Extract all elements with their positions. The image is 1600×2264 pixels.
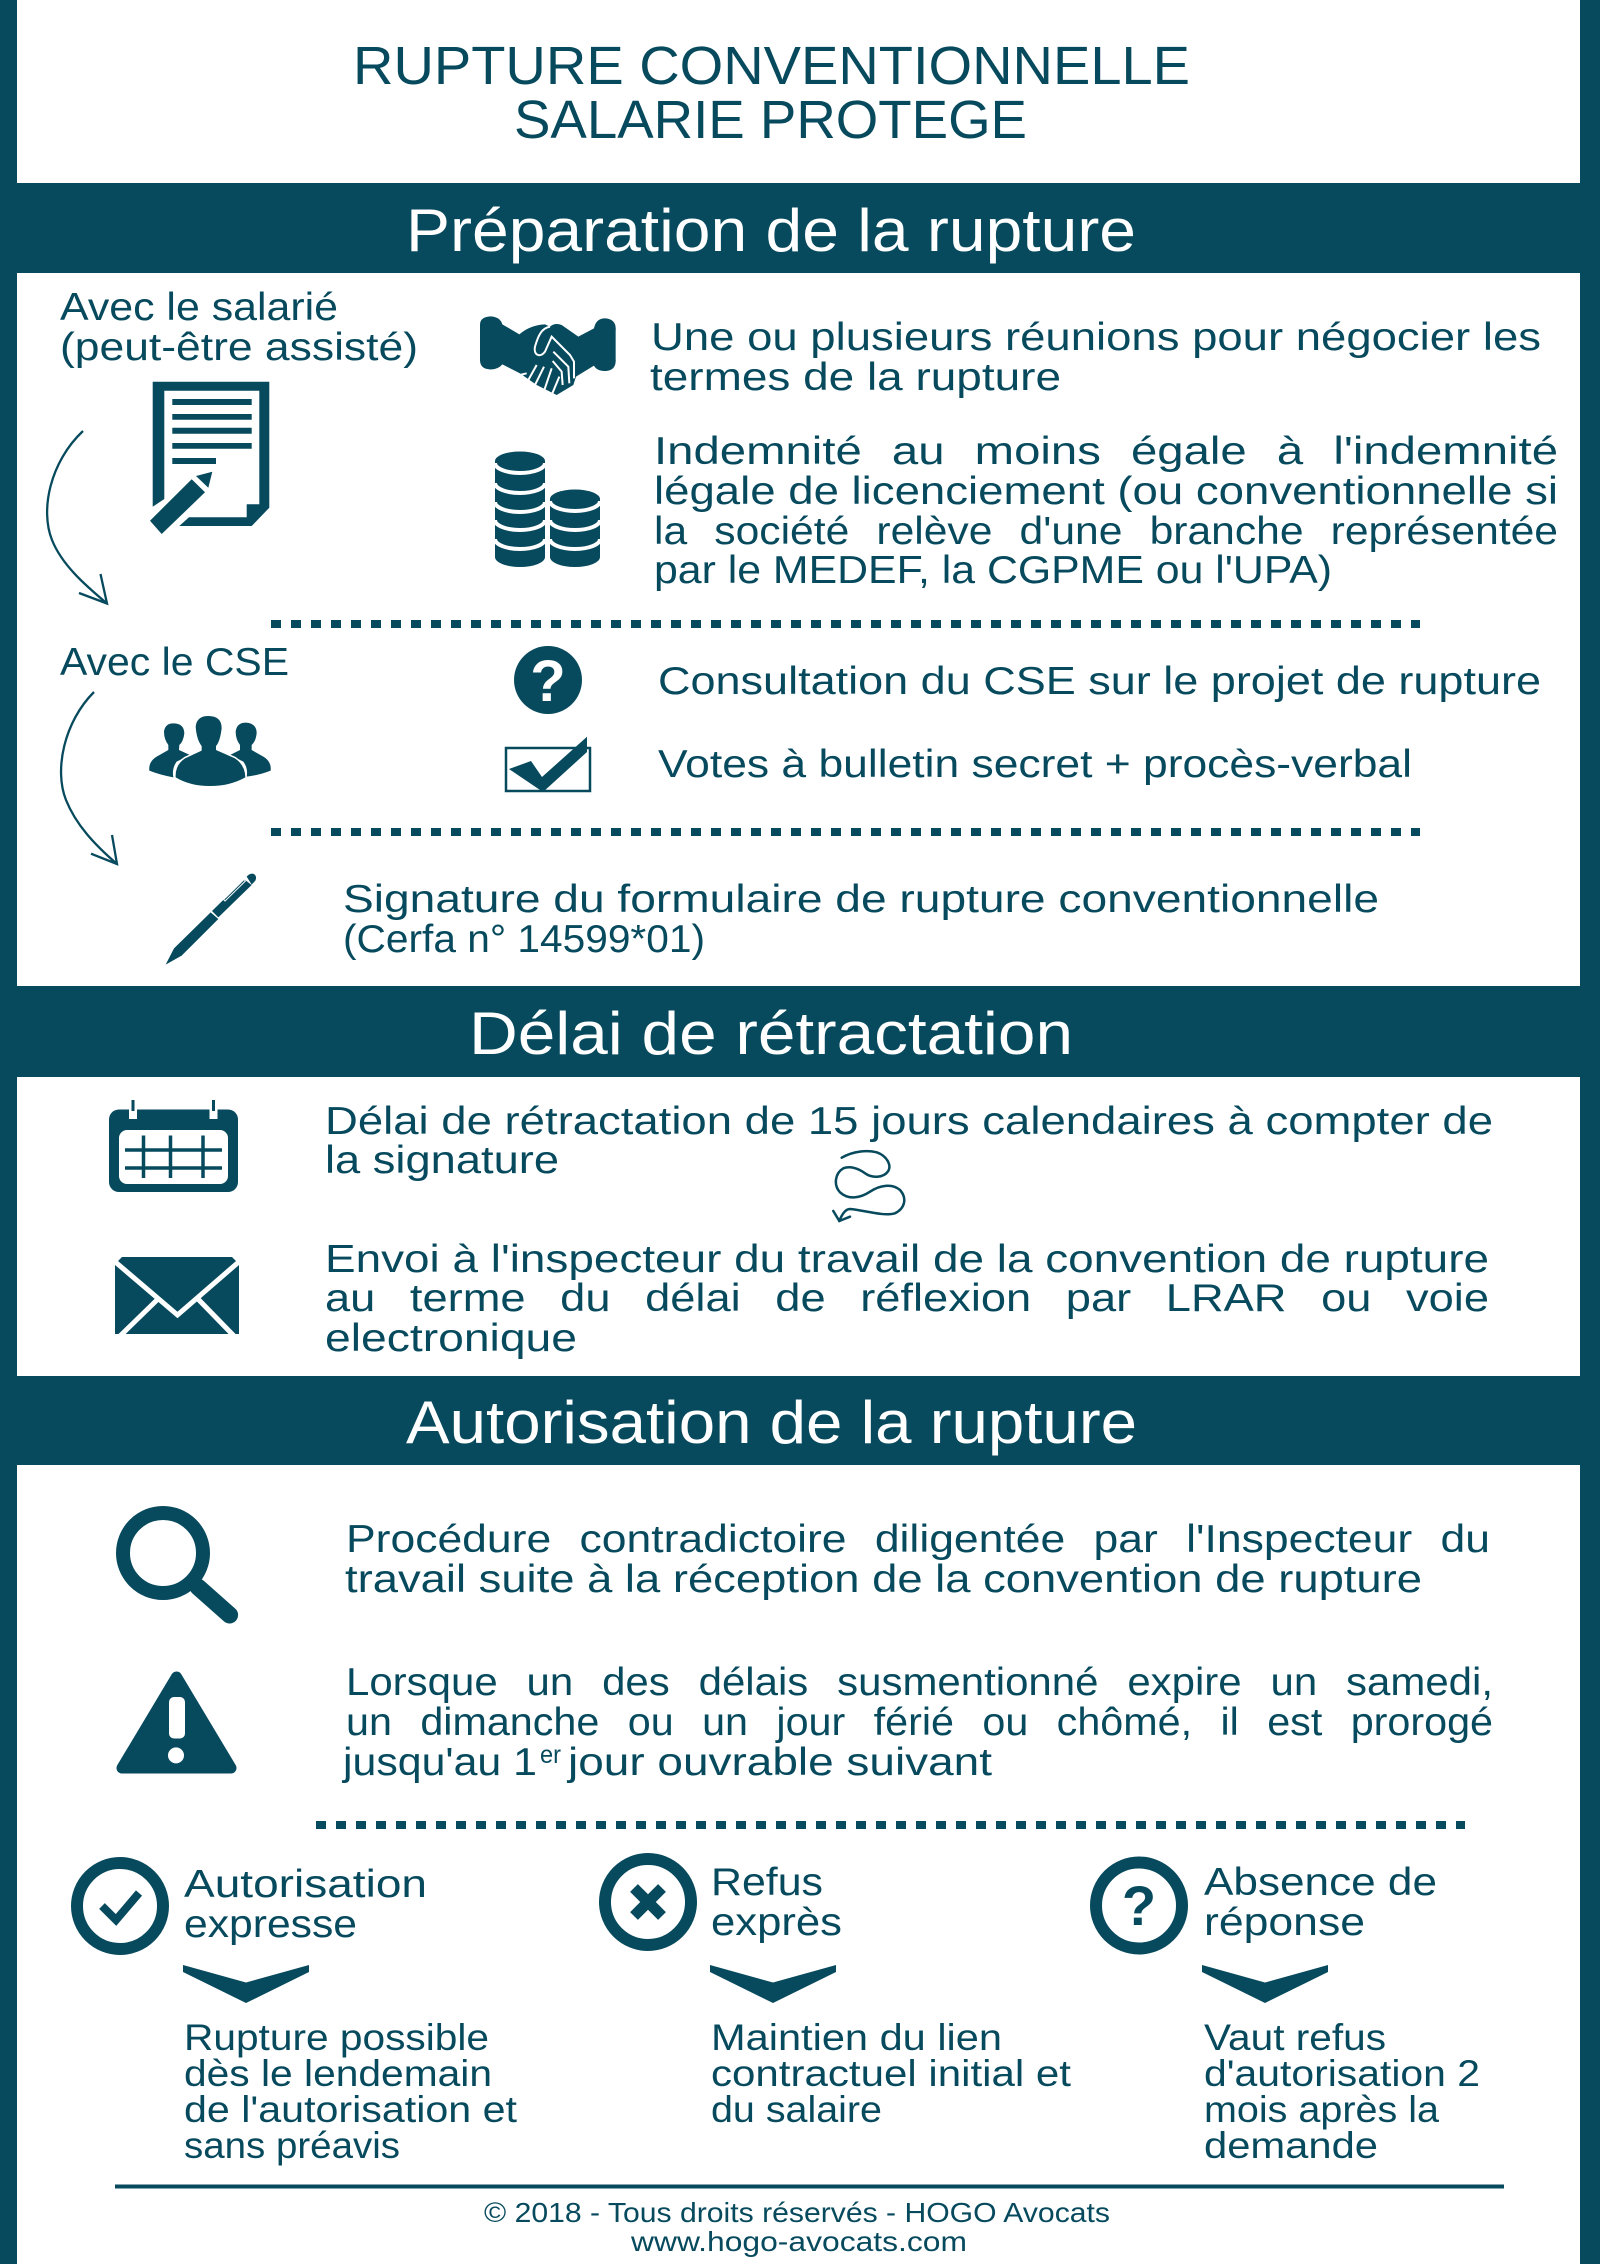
icon: check circle [77, 1863, 163, 1949]
heading: refus exprès [711, 1861, 842, 1944]
icon: pen [166, 874, 256, 965]
text: procédure contradictoire: Procédure contradictoire diligentée par l'Inspecteur du [346, 1518, 1490, 1561]
text: maintien du lien: contractuel initial et [711, 2053, 1072, 2094]
heading: délai de rétractation: Délai de rétractation [469, 1000, 1073, 1067]
text: procédure contradictoire: travail suite à la réception de la convention de rupture [345, 1558, 1422, 1601]
arrow: scribble [833, 1151, 904, 1221]
text: signature [343, 878, 1379, 961]
text: délai de 15 jours: la signature [325, 1139, 559, 1182]
footer: © 2018 - Tous droits réservés - HOGO Avocats [484, 2197, 1110, 2228]
text: envoi à l'inspecteur: au terme du délai de réflexion par LRAR ou voie [325, 1277, 1489, 1320]
text: votes: Votes à bulletin secret + procès-verbal [658, 743, 1412, 786]
text: maintien du lien: Maintien du lien [711, 2017, 1002, 2058]
text: délais prorogés: Lorsque un des délais susmentionné expire un samedi, [346, 1661, 1493, 1704]
text: réunions [650, 316, 1541, 399]
icon: question mark badge: ? [530, 649, 566, 714]
text: vaut refus [1204, 2017, 1480, 2166]
heading: autorisation expresse [184, 1863, 427, 1946]
icon: cross circle [605, 1859, 691, 1945]
heading: absence de réponse: réponse [1204, 1901, 1365, 1944]
panel: préparation [17, 273, 1580, 986]
heading: refus exprès: Refus [711, 1861, 823, 1904]
panel: autorisation de la rupture [17, 1465, 1580, 2264]
heading: absence de réponse [1204, 1861, 1437, 1944]
heading: absence de réponse: Absence de [1204, 1861, 1437, 1904]
text: maintien du lien [711, 2017, 1072, 2130]
icon: chevron [1202, 1965, 1328, 2003]
text: avec le salarié [60, 286, 418, 369]
text: rupture possible: dès le lendemain [184, 2053, 492, 2094]
icon: envelope [113, 1257, 241, 1336]
arrow: CSE to signature [61, 692, 117, 864]
text: vaut refus: Vaut refus [1204, 2017, 1386, 2058]
text: délais prorogés: jusqu'au 1 [342, 1741, 537, 1784]
text: indemnité: légale de licenciement (ou conventionnelle si [654, 470, 1558, 513]
icon: chevron [183, 1965, 309, 2003]
panel: délai de rétractation [17, 1077, 1580, 1376]
text: envoi à l'inspecteur: electronique [325, 1317, 577, 1360]
icon: ballot checkbox [506, 737, 590, 792]
text: maintien du lien: du salaire [711, 2089, 882, 2130]
icon: warning triangle [122, 1677, 231, 1768]
text: signature: Signature du formulaire de rupture conventionnelle [343, 878, 1379, 921]
text: réunions: Une ou plusieurs réunions pour négocier les [651, 316, 1541, 359]
arrow: salarié to CSE [47, 431, 107, 604]
icon: document and pencil [150, 382, 269, 534]
text: procédure contradictoire [345, 1518, 1490, 1601]
text: indemnité [654, 430, 1558, 592]
text: délais prorogés [342, 1661, 1493, 1784]
title: RUPTURE CONVENTIONNELLE [353, 36, 1190, 96]
text: avec le salarié: (peut-être assisté) [60, 326, 418, 369]
column: refus exprès [605, 1859, 1072, 2130]
text: rupture possible: Rupture possible [184, 2017, 489, 2058]
heading: autorisation expresse: Autorisation [184, 1863, 427, 1906]
title [353, 36, 1190, 150]
text: délai de 15 jours [325, 1100, 1493, 1182]
icon: chevron [710, 1965, 836, 2003]
text: consultation: Consultation du CSE sur le projet de rupture [658, 660, 1541, 703]
text: rupture possible [184, 2017, 518, 2166]
heading: refus exprès: exprès [711, 1901, 842, 1944]
text: signature: (Cerfa n° 14599*01) [343, 918, 705, 961]
footer: www.hogo-avocats.com [630, 2226, 967, 2257]
title: SALARIE PROTEGE [514, 90, 1027, 150]
icon: coin stacks [495, 452, 600, 567]
text: délais prorogés: jour ouvrable suivant [567, 1741, 992, 1784]
icon: calendar [109, 1100, 238, 1192]
heading: préparation de la rupture: Préparation de la rupture [406, 197, 1136, 264]
text: avec le salarié: Avec le salarié [60, 286, 338, 329]
text: délai de 15 jours: Délai de rétractation de 15 jours calendaires à compter de [325, 1100, 1493, 1143]
icon: question circle: ? [1122, 1874, 1156, 1937]
heading: autorisation de la rupture: Autorisation de la rupture [406, 1389, 1137, 1456]
icon: question circle [1096, 1862, 1182, 1948]
text: délais prorogés: un dimanche ou un jour férié ou chômé, il est prorogé [346, 1701, 1493, 1744]
text: avec le CSE: Avec le CSE [60, 641, 289, 684]
footer [484, 2197, 1110, 2257]
text: vaut refus: mois après la [1204, 2089, 1439, 2130]
column: autorisation expresse [77, 1863, 518, 2166]
text: indemnité: Indemnité au moins égale à l'indemnité [654, 430, 1558, 473]
text: rupture possible: de l'autorisation et [184, 2089, 518, 2130]
text: vaut refus: demande [1204, 2125, 1378, 2166]
icon: handshake [480, 316, 616, 395]
text: indemnité: par le MEDEF, la CGPME ou l'UPA) [654, 549, 1332, 592]
panel: title area [17, 0, 1580, 183]
icon: magnifying glass [123, 1513, 230, 1615]
column: absence de réponse [1096, 1861, 1480, 2166]
text: envoi à l'inspecteur [325, 1238, 1489, 1360]
text: envoi à l'inspecteur: Envoi à l'inspecteur du travail de la convention de rupture [325, 1238, 1489, 1281]
text: délais prorogés: er [540, 1741, 561, 1769]
text: vaut refus: d'autorisation 2 [1204, 2053, 1480, 2094]
text: indemnité: la société relève d'une branche représentée [654, 510, 1558, 553]
heading: autorisation expresse: expresse [184, 1903, 357, 1946]
icon: question mark badge [514, 646, 582, 714]
text: rupture possible: sans préavis [184, 2125, 400, 2166]
text: réunions: termes de la rupture [650, 356, 1061, 399]
icon: group of people [149, 716, 271, 786]
